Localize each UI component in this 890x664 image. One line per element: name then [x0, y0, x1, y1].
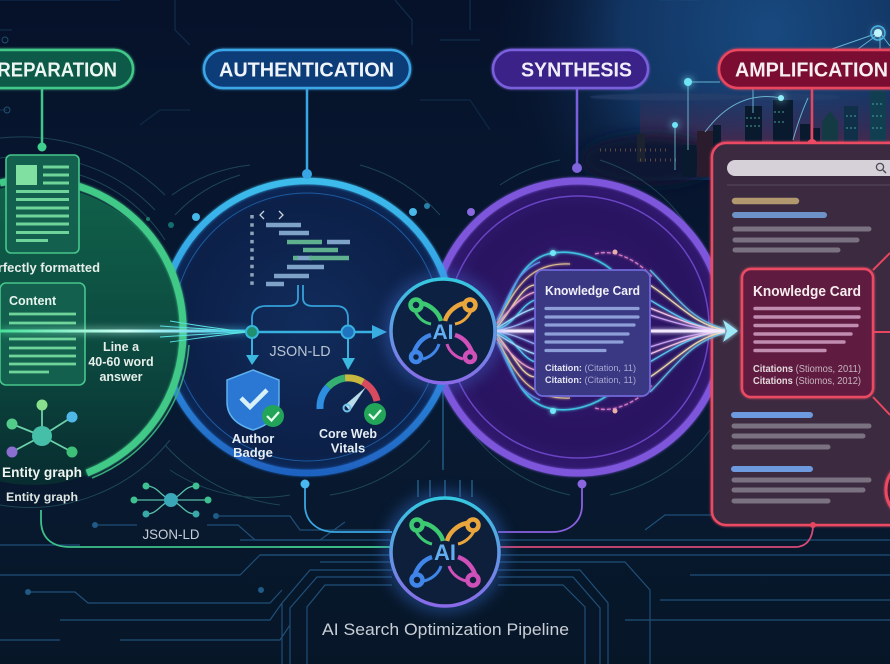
- label: entity graph: Entity graph: [2, 465, 82, 480]
- label: answer length: 40-60 word: [88, 355, 154, 369]
- title: AI Search Optimization Pipeline: [322, 620, 569, 639]
- panel: preparation contents: [0, 155, 154, 504]
- panel: authentication contents: [0, 211, 387, 460]
- knowledge card: highlighted: [742, 269, 873, 397]
- stage pill: authentication: AUTHENTICATION: [219, 58, 394, 82]
- stage pill: amplification: [719, 50, 890, 88]
- knowledge card: synthesis: Knowledge Card: [545, 284, 640, 298]
- stem connectors: [38, 88, 817, 179]
- icon: JSON-LD graph: [130, 482, 212, 518]
- stage pill: amplification: AMPLIFICATION: [735, 58, 888, 82]
- stage pill: authentication: [204, 50, 410, 88]
- icon: entity graph: [6, 400, 78, 458]
- small connector node row on rings: [146, 203, 475, 228]
- lower connectors to bottom badge: [280, 480, 816, 547]
- content card: [0, 283, 85, 385]
- flow lines through synthesis: [497, 252, 725, 410]
- label: answer length: Line a: [103, 340, 140, 354]
- stage pill: synthesis: [493, 50, 648, 88]
- search bar: [727, 160, 890, 176]
- bottom AI badge: [383, 490, 507, 614]
- label: core web vitals: Core Web: [319, 426, 377, 441]
- label: JSON-LD lower: JSON-LD: [142, 526, 200, 542]
- knowledge card: synthesis: Citation: (Citation, 11): [545, 375, 636, 386]
- flow nodes: [550, 250, 618, 414]
- stage pill: preparation: [0, 50, 133, 88]
- outer concentric arcs: [0, 137, 710, 507]
- night city skyline: [480, 0, 890, 186]
- arrow into search results: [723, 320, 738, 342]
- top result lines: [735, 201, 869, 250]
- beam and nodes: [0, 321, 387, 370]
- stage pill: synthesis: SYNTHESIS: [521, 58, 632, 82]
- knowledge card: highlighted: Citations (Stiomos, 2012): [753, 375, 861, 387]
- content card: Content: [9, 294, 57, 308]
- code block: [252, 211, 350, 285]
- label: entity graph repeat: Entity graph: [6, 490, 78, 504]
- knowledge card: highlighted: Knowledge Card: [753, 284, 861, 300]
- label: answer length: answer: [99, 370, 143, 384]
- label: author badge: Author: [232, 431, 274, 446]
- central light beam: [497, 330, 725, 332]
- bottom AI badge: AI: [434, 540, 456, 565]
- lower green connector: [41, 510, 390, 547]
- knowledge card: highlighted: Citations (Stiomos, 2011): [753, 363, 861, 375]
- panel: authentication circle: [161, 181, 453, 473]
- panel: preparation circle: [0, 179, 189, 485]
- label: author badge: Badge: [233, 445, 273, 460]
- knowledge card: synthesis: [535, 270, 650, 396]
- icon: author badge shield: [227, 370, 284, 430]
- icon: formatted document: [6, 155, 79, 253]
- lower result lines: [734, 415, 869, 501]
- central AI badge: AI: [432, 321, 454, 344]
- icon: core web vitals gauge: [320, 378, 386, 425]
- label: JSON-LD: JSON-LD: [270, 344, 330, 360]
- knowledge card: synthesis: Citation: (Citation, 11): [545, 363, 636, 374]
- panel: synthesis circle: [432, 181, 724, 473]
- panel: search results page: [712, 143, 890, 525]
- bracket connector: [252, 285, 348, 326]
- central AI badge: [383, 271, 503, 391]
- label: core web vitals: Vitals: [331, 440, 365, 456]
